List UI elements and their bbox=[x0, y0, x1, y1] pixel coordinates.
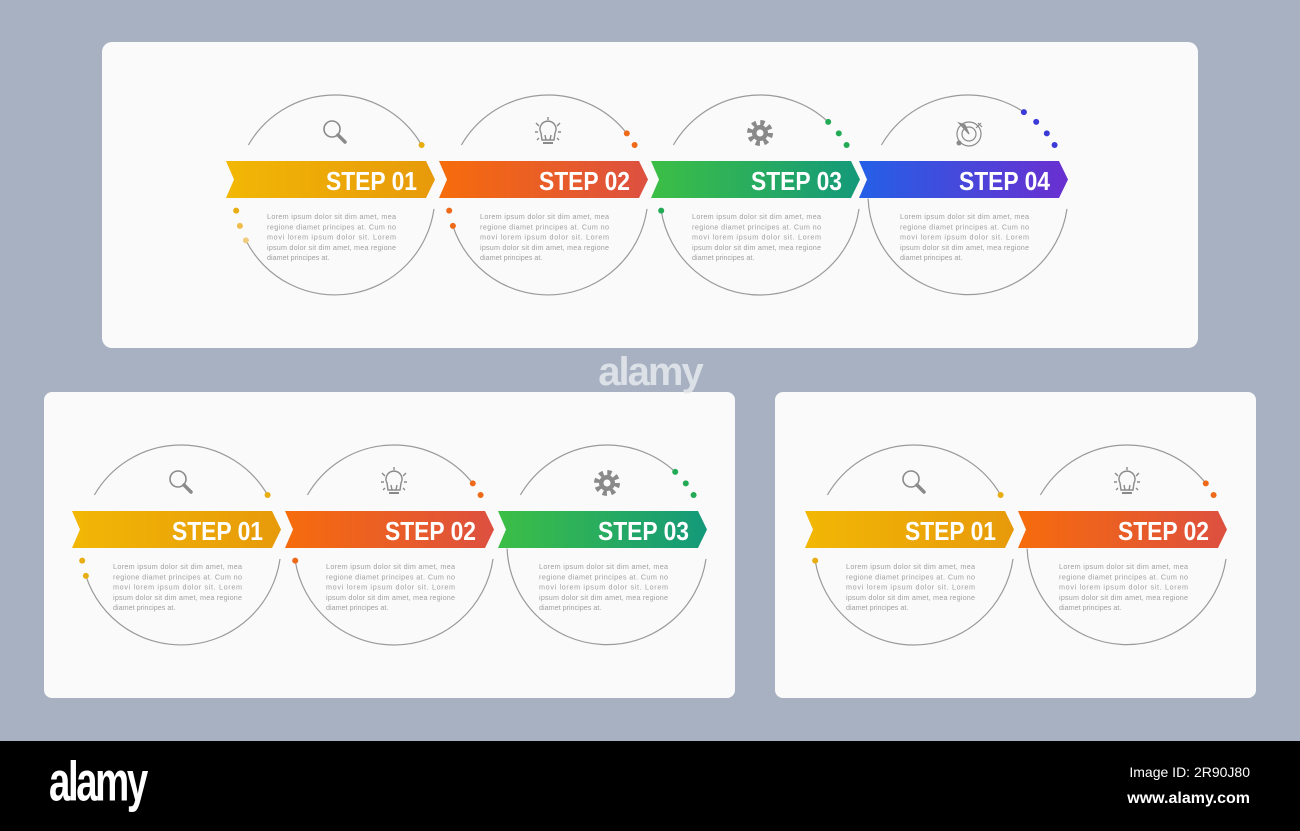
step 02 (three-step): STEP 02 bbox=[385, 516, 476, 546]
step 01 (three-step) bbox=[72, 445, 281, 645]
step 03 (three-step) bbox=[498, 445, 707, 645]
footer logo: alamy bbox=[49, 752, 149, 813]
panel: top four-step bbox=[102, 42, 1198, 348]
step 02 (two-step): STEP 02 bbox=[1118, 516, 1209, 546]
step 03 (top): STEP 03 bbox=[751, 166, 842, 196]
panel: bottom-right two-step bbox=[775, 392, 1256, 698]
step 02 (top): STEP 02 bbox=[539, 166, 630, 196]
step 01 (top) bbox=[226, 95, 435, 295]
step 01 (two-step) bbox=[805, 445, 1014, 645]
step 02 (top) bbox=[439, 95, 648, 295]
step 02 (three-step) bbox=[285, 445, 494, 645]
step 01 (top): STEP 01 bbox=[326, 166, 417, 196]
panel: bottom-left three-step bbox=[44, 392, 735, 698]
step 01 (three-step): STEP 01 bbox=[172, 516, 263, 546]
footer url: www.alamy.com bbox=[1126, 790, 1250, 807]
step 03 (three-step): STEP 03 bbox=[598, 516, 689, 546]
footer bar bbox=[0, 741, 1300, 831]
footer image id: Image ID: 2R90J80 bbox=[1129, 764, 1250, 780]
step 01 (two-step): STEP 01 bbox=[905, 516, 996, 546]
step 02 (two-step) bbox=[1018, 445, 1227, 645]
watermark: alamy: alamy bbox=[598, 350, 704, 394]
step 04 (top): STEP 04 bbox=[959, 166, 1050, 196]
step 03 (top) bbox=[651, 95, 860, 295]
step 04 (top) bbox=[859, 95, 1068, 295]
